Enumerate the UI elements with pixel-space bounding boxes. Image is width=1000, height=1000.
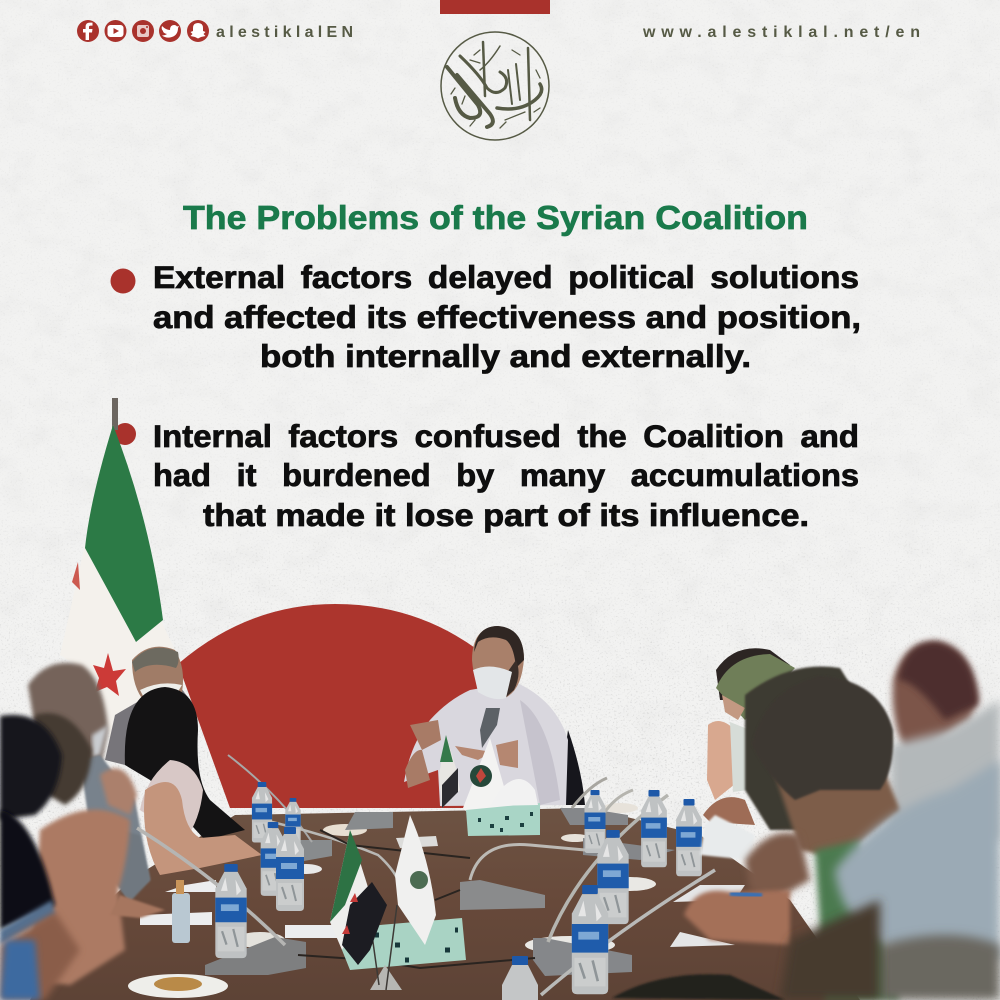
title: The Problems of the Syrian Coalition: [183, 199, 808, 236]
foreground attendees on left: [0, 713, 165, 1000]
cropped bottle at bottom edge: [502, 956, 538, 1000]
tissue box on speaker desk: [466, 803, 540, 836]
white napkins: [700, 815, 755, 860]
hand on table: [703, 797, 755, 825]
bald man mask: [92, 725, 108, 757]
foreground grey blue shirt: [835, 760, 1000, 960]
dark object on table: [612, 974, 785, 1000]
red circle behind the speaker: [178, 604, 500, 808]
bald man blurred: [28, 663, 108, 770]
dark clothes: [745, 667, 860, 830]
icon: facebook: [77, 20, 99, 42]
foreground dark shirt: [0, 810, 55, 930]
woman with black hair: [125, 687, 262, 875]
speaker tie: [480, 708, 500, 748]
foreground lower arm: [0, 912, 80, 1000]
central foreground man neck: [770, 760, 900, 860]
icon: twitter: [159, 20, 181, 42]
bullet: internal factors: [114, 423, 136, 445]
tissue on left of speaker: [396, 836, 438, 848]
hand near pen: [745, 833, 810, 900]
lower right blur: [880, 935, 1000, 1000]
speaker hands: [410, 720, 441, 750]
second man: [35, 713, 92, 805]
far left attendees: [28, 647, 190, 900]
top red tab: [440, 0, 550, 14]
table items: [128, 755, 745, 1000]
attendees on right: [612, 642, 1000, 1000]
desk flag: Syrian front: [330, 830, 387, 965]
clasped hands foreground: [684, 890, 790, 945]
blue pen: [730, 893, 762, 896]
speaker shirt: [404, 682, 568, 806]
desk flag stand: [370, 965, 402, 990]
tissue box front: [342, 918, 466, 970]
papers right: [670, 885, 745, 947]
far right man: [892, 642, 978, 750]
bald man shirt: [80, 755, 150, 900]
foreground green collar: [815, 840, 900, 1000]
text block: external factors: External factors delayed political solutions: [153, 259, 859, 295]
microphone bases: [298, 812, 393, 862]
text block: internal factors: [153, 418, 859, 533]
central foreground man hair: [752, 676, 893, 800]
speaker head: [472, 626, 524, 698]
text block: internal factors: that made it lose part of its influence.: [203, 497, 809, 533]
attendee face with mask: [132, 647, 183, 702]
microphone arms: [137, 828, 285, 945]
blurred arms and hands: [30, 810, 130, 985]
woman with dark hair: [716, 648, 790, 700]
grey shirt: [112, 830, 150, 902]
blurred bottle: [0, 940, 40, 1000]
foreground head: [0, 715, 62, 820]
text block: internal factors: had it burdened by many accumulations: [153, 457, 859, 493]
desk flag: coalition: [463, 738, 515, 822]
text block: external factors: and affected its effectiveness and position,: [153, 299, 861, 335]
woman blouse: [140, 760, 203, 840]
icon: snapchat: [187, 20, 209, 42]
speaker chair: [558, 730, 585, 805]
woman white garment: [730, 722, 750, 792]
speaker mask: [473, 666, 512, 699]
papers: [140, 880, 338, 938]
cables: [298, 830, 535, 968]
social handle: alestiklalEN: [216, 24, 353, 41]
bullet: external factors: [110, 268, 136, 294]
woman hands and arm: [707, 721, 740, 800]
icon: instagram: [132, 20, 154, 42]
text block: external factors: both internally and externally.: [260, 338, 751, 374]
icon: youtube: [104, 20, 126, 42]
small desk flags near speaker: [439, 735, 540, 836]
text block: external factors: [153, 259, 861, 374]
water bottles: [252, 782, 272, 842]
table: [30, 808, 860, 1000]
text block: internal factors: Internal factors confused the Coalition and: [153, 418, 859, 454]
desk flag: Syrian: [439, 735, 460, 808]
attendee suit: [105, 680, 190, 770]
website url: www.alestiklal.net/en: [642, 24, 920, 41]
hijab: [716, 654, 795, 720]
sanitizer: [172, 893, 190, 943]
social media icons: [77, 20, 209, 42]
plates: [290, 864, 322, 874]
desk flag: coalition front: [395, 815, 436, 945]
large Syrian flag on pole: [60, 398, 175, 740]
speaker at head of table: [404, 626, 585, 806]
logo: calligraphic seal: [441, 32, 549, 140]
woman arm: [144, 782, 262, 875]
